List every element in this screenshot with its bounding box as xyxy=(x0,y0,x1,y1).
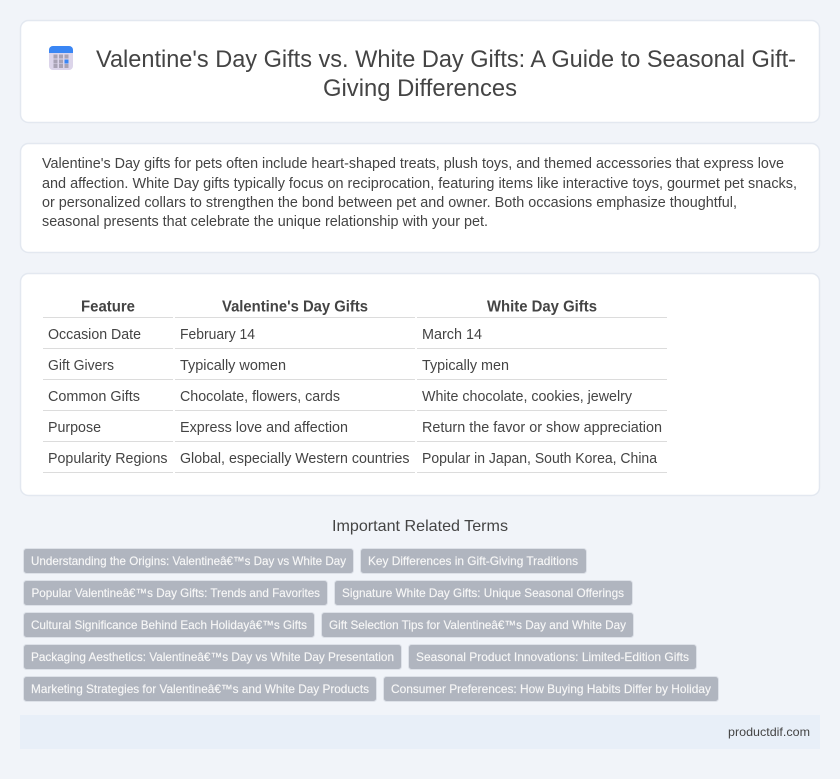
chip xyxy=(408,644,696,670)
table row: purpose: Return the favor or show appreciation xyxy=(422,420,662,436)
chip xyxy=(24,676,376,702)
chip: Seasonal Product Innovations: Limited-Edition Gifts xyxy=(416,650,689,664)
table header row: Valentine's Day Gifts xyxy=(222,298,368,316)
chip: Understanding the Origins: Valentineâ€™s Day vs White Day xyxy=(31,554,346,568)
footer: productdif.com xyxy=(728,725,810,739)
chip: Gift Selection Tips for Valentineâ€™s Day and White Day xyxy=(329,618,626,632)
table row: gift givers: Typically men xyxy=(422,358,509,374)
chip xyxy=(24,644,402,670)
table header row: Feature xyxy=(81,298,135,316)
table header row xyxy=(43,298,667,318)
table row: popularity regions: Global, especially Western countries xyxy=(180,451,410,467)
chip: Consumer Preferences: How Buying Habits Differ by Holiday xyxy=(391,682,711,696)
table row: common gifts: Chocolate, flowers, cards xyxy=(180,389,340,405)
heading: important related terms: Important Related Terms xyxy=(332,518,508,535)
chip: Cultural Significance Behind Each Holidayâ€™s Gifts xyxy=(31,618,307,632)
chip xyxy=(384,676,718,702)
chip: Signature White Day Gifts: Unique Seasonal Offerings xyxy=(342,586,624,600)
table row: occasion date: Occasion Date xyxy=(48,327,141,343)
table row: gift givers xyxy=(43,358,667,380)
title: Valentine's Day Gifts vs. White Day Gifts: A Guide to Seasonal Gift- xyxy=(96,46,796,73)
text block: summary: seasonal presents that celebrate the unique relationship with your pet. xyxy=(42,214,488,230)
table row: common gifts: White chocolate, cookies, jewelry xyxy=(422,389,633,405)
chip: Marketing Strategies for Valentineâ€™s and White Day Products xyxy=(31,682,369,696)
table row: gift givers: Gift Givers xyxy=(48,358,114,374)
panel: intro paragraph xyxy=(20,144,820,252)
chip: Packaging Aesthetics: Valentineâ€™s Day vs White Day Presentation xyxy=(31,650,394,664)
chip xyxy=(322,612,634,638)
footer xyxy=(20,715,820,749)
chip: Key Differences in Gift-Giving Traditions xyxy=(368,554,578,568)
table row: common gifts xyxy=(43,389,667,411)
panel: related term chips xyxy=(24,548,718,702)
table row: popularity regions: Popularity Regions xyxy=(48,451,168,467)
table row: purpose xyxy=(43,420,667,442)
table header row: White Day Gifts xyxy=(487,298,597,316)
chip xyxy=(334,580,632,606)
chip: Popular Valentineâ€™s Day Gifts: Trends and Favorites xyxy=(32,586,320,600)
text block: summary: Valentine's Day gifts for pets often include heart-shaped treats, plush toys, and themed accessories that express love xyxy=(42,156,784,172)
table row: gift givers: Typically women xyxy=(180,358,286,374)
panel: title header xyxy=(20,20,820,122)
table row: purpose: Express love and affection xyxy=(180,420,348,436)
table row: common gifts: Common Gifts xyxy=(48,389,140,405)
panel: comparison table xyxy=(20,274,820,496)
table row: popularity regions xyxy=(43,451,667,473)
title: Giving Differences xyxy=(323,75,517,102)
chip xyxy=(24,548,354,574)
table row: occasion date: February 14 xyxy=(180,327,255,343)
text block: summary xyxy=(42,156,797,230)
table row: occasion date xyxy=(43,327,667,349)
icon: calendar xyxy=(49,46,73,70)
table row: popularity regions: Popular in Japan, South Korea, China xyxy=(422,451,657,467)
text block: summary: and affection. White Day gifts typically focus on reciprocation, featuring items like interactive toys, gourmet pet snacks, xyxy=(42,176,797,192)
title xyxy=(96,46,796,102)
chip xyxy=(24,580,328,606)
chip xyxy=(360,548,586,574)
table row: purpose: Purpose xyxy=(48,420,101,436)
table row: occasion date: March 14 xyxy=(422,327,482,343)
text block: summary: or personalized collars to strengthen the bond between pet and owner. Both occasions emphasize thoughtful, xyxy=(42,195,737,211)
chip xyxy=(24,612,314,638)
